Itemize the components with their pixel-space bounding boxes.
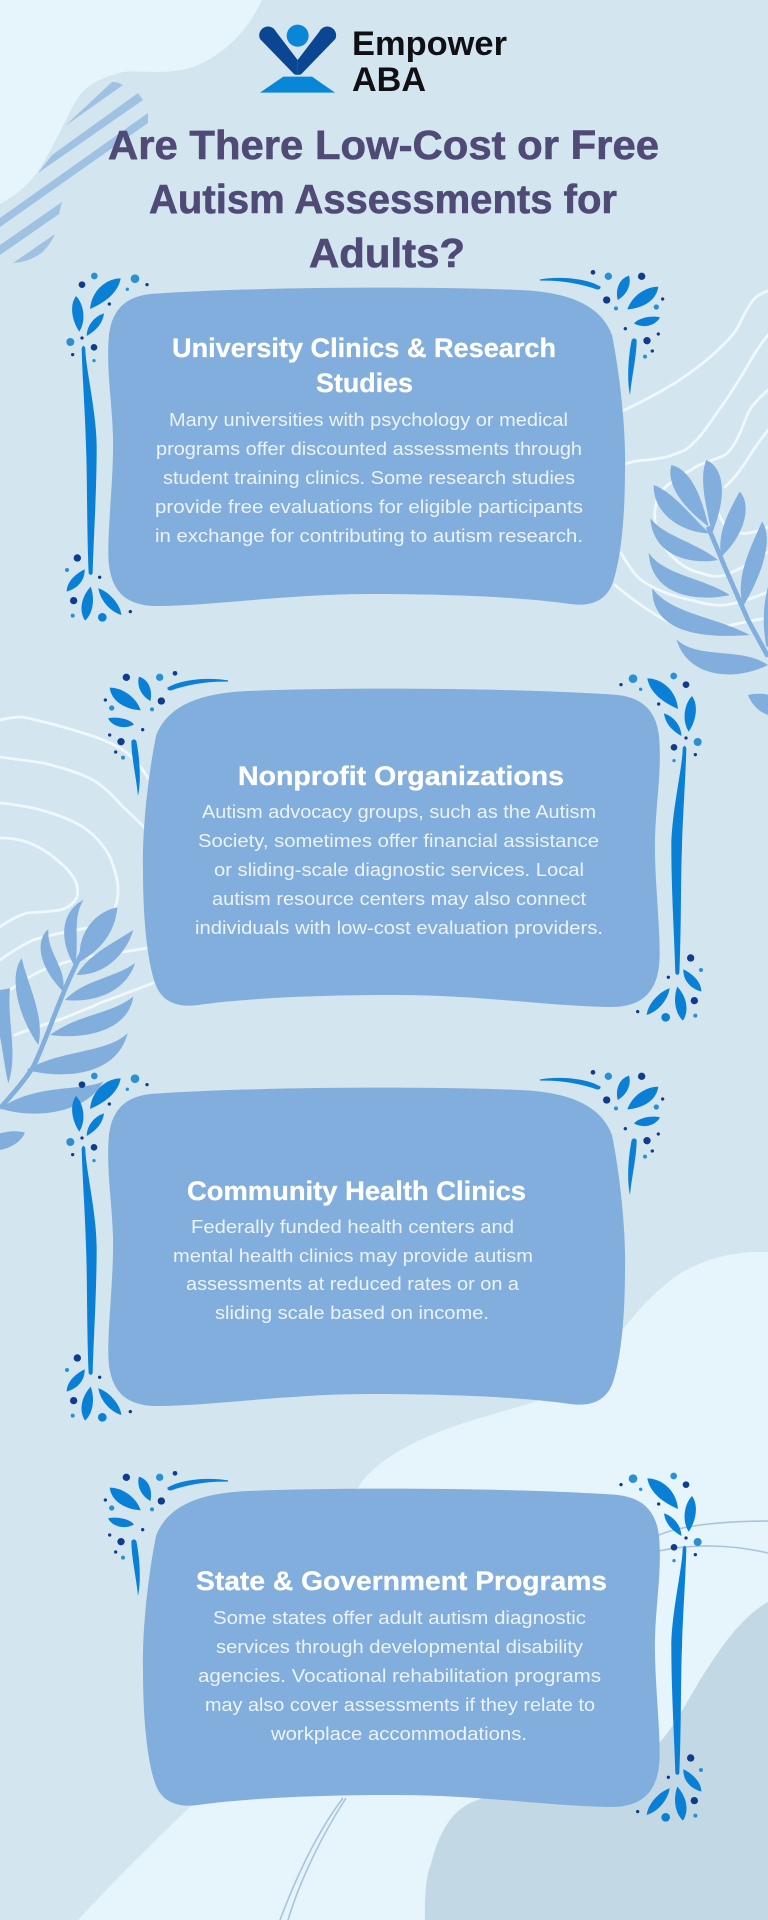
ornament: panel 3 right flourish	[540, 1070, 664, 1195]
thin lines bottom	[280, 1798, 346, 1920]
panel 1 body text: programs offer discounted assessments through	[156, 439, 582, 459]
panel 2 body text: Society, sometimes offer financial assistance	[198, 831, 599, 851]
ornament: panel 2 left flourish	[104, 671, 228, 796]
panel 4 body text: Some states offer adult autism diagnostic	[213, 1608, 586, 1628]
panel 3 body text	[173, 1217, 533, 1323]
panel: Nonprofit Organizations	[143, 689, 660, 1007]
panel 1 body text: Many universities with psychology or medical	[169, 410, 568, 430]
ornament: panel 1 right flourish	[540, 270, 664, 395]
panel 4 background	[143, 1489, 660, 1807]
white contour lines left	[0, 717, 153, 1035]
panel 1 heading: Studies	[316, 368, 413, 398]
background shape: top-left light blob	[0, 0, 262, 204]
panel 4 heading: State & Government Programs	[196, 1566, 607, 1596]
panel 3 body text: mental health clinics may provide autism	[173, 1246, 533, 1266]
ornament: panel 4 right flourish	[619, 1473, 703, 1822]
panel: University Clinics & Research Studies	[108, 288, 625, 606]
logo: Empower ABA	[259, 25, 507, 99]
panel 3 body text: Federally funded health centers and	[191, 1217, 514, 1237]
panel: Community Health Clinics	[108, 1088, 625, 1406]
ornament: panel 3 left flourish	[65, 1073, 149, 1422]
ornament: panel 2 right flourish	[619, 673, 703, 1022]
panel 4 body text: agencies. Vocational rehabilitation programs	[198, 1666, 601, 1686]
title	[108, 122, 659, 276]
background shape: lower-right light blob	[78, 1252, 768, 1920]
ornament: panel 1 left flourish	[65, 273, 149, 622]
leaf branch left	[0, 900, 135, 1150]
panel 3 background	[108, 1088, 625, 1406]
leaf branch right	[649, 460, 768, 715]
panel 3 body text: assessments at reduced rates or on a	[186, 1274, 520, 1294]
panel 2 heading: Nonprofit Organizations	[238, 761, 564, 791]
logo wordmark: Empower	[352, 25, 507, 63]
panel 4 body text	[198, 1608, 601, 1744]
panel 3 body text: sliding scale based on income.	[215, 1303, 489, 1323]
panel: State & Government Programs	[143, 1489, 660, 1807]
decorative stripes top-left	[0, 82, 148, 263]
panel 1 body text	[155, 410, 583, 546]
icon: logo mark	[259, 25, 336, 93]
panel 4 body text: workplace accommodations.	[270, 1724, 527, 1744]
background shape: bottom-right dark blob	[425, 1602, 768, 1920]
panel 1 background	[108, 288, 625, 606]
panel 2 body text: Autism advocacy groups, such as the Autism	[202, 802, 596, 822]
thin lines lower right	[659, 1521, 768, 1553]
title: Are There Low-Cost or Free	[108, 122, 659, 168]
logo wordmark	[352, 25, 507, 99]
panel 2 background	[143, 689, 660, 1007]
panel 1 body text: provide free evaluations for eligible participants	[155, 497, 583, 517]
panel 2 body text: individuals with low-cost evaluation providers.	[195, 918, 603, 938]
panel 1 body text: student training clinics. Some research studies	[163, 468, 575, 488]
white contour lines right	[615, 291, 768, 630]
title: Adults?	[309, 230, 465, 276]
panel 2 body text: autism resource centers may also connect	[212, 889, 586, 909]
panel 1 body text: in exchange for contributing to autism research.	[155, 526, 583, 546]
panel 2 body text: or sliding-scale diagnostic services. Local	[214, 860, 584, 880]
title: Autism Assessments for	[149, 176, 617, 222]
ornament: panel 4 left flourish	[104, 1471, 228, 1596]
panel 1 heading: University Clinics & Research	[172, 333, 556, 363]
panel 3 heading: Community Health Clinics	[187, 1176, 526, 1206]
panel 2 body text	[195, 802, 603, 938]
panel 4 body text: may also cover assessments if they relate to	[205, 1695, 595, 1715]
logo wordmark: ABA	[352, 61, 426, 99]
panel 4 body text: services through developmental disability	[216, 1637, 583, 1657]
panel 1 heading	[172, 333, 556, 398]
